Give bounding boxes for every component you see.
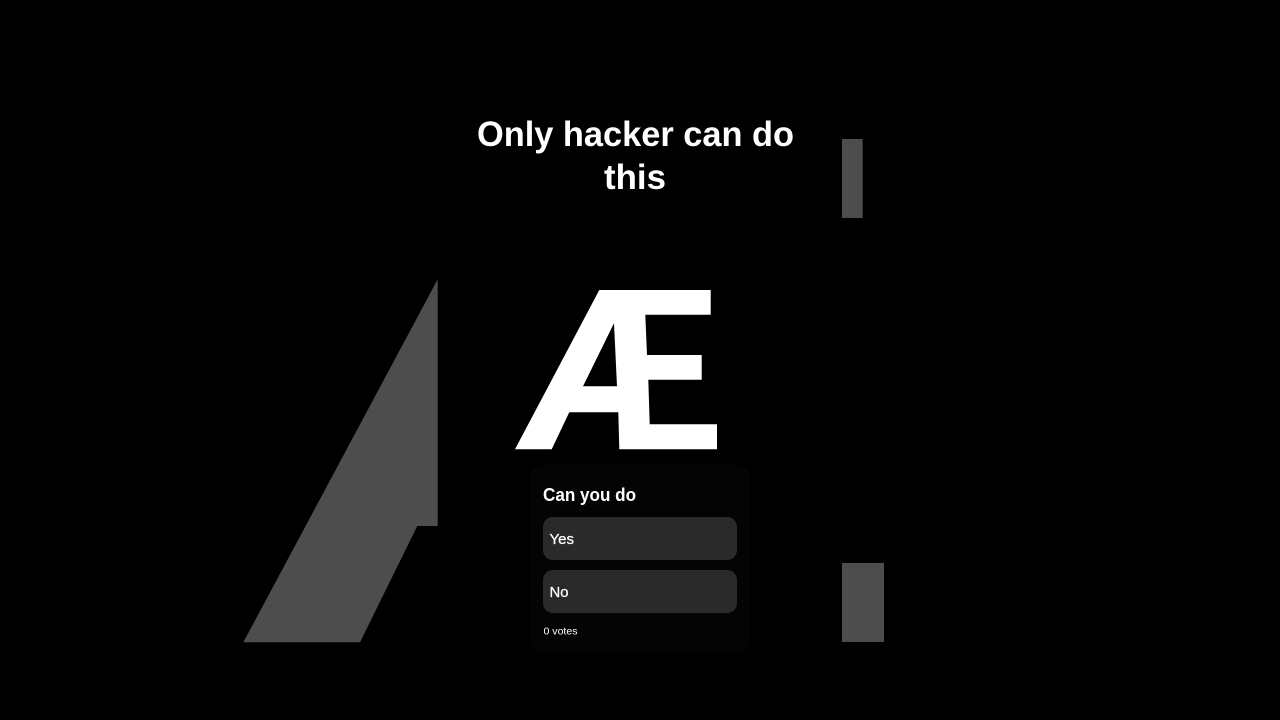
shape: faded bar bottom right — [842, 563, 884, 642]
poll option: Yes: Yes — [550, 532, 574, 548]
poll option: No — [543, 570, 737, 613]
icon: AE ligature glyph — [515, 290, 717, 449]
panel: poll card — [530, 465, 750, 652]
poll option: Yes — [543, 517, 737, 560]
title: this — [604, 158, 666, 197]
title — [477, 115, 794, 197]
poll question: Can you do — [543, 485, 636, 505]
poll option: No: No — [550, 585, 568, 601]
shape: faded bar top right — [842, 139, 863, 218]
title: Only hacker can do — [477, 115, 794, 154]
vote count: 0 votes — [544, 626, 578, 638]
shape: faded A fragment left — [243, 279, 438, 642]
